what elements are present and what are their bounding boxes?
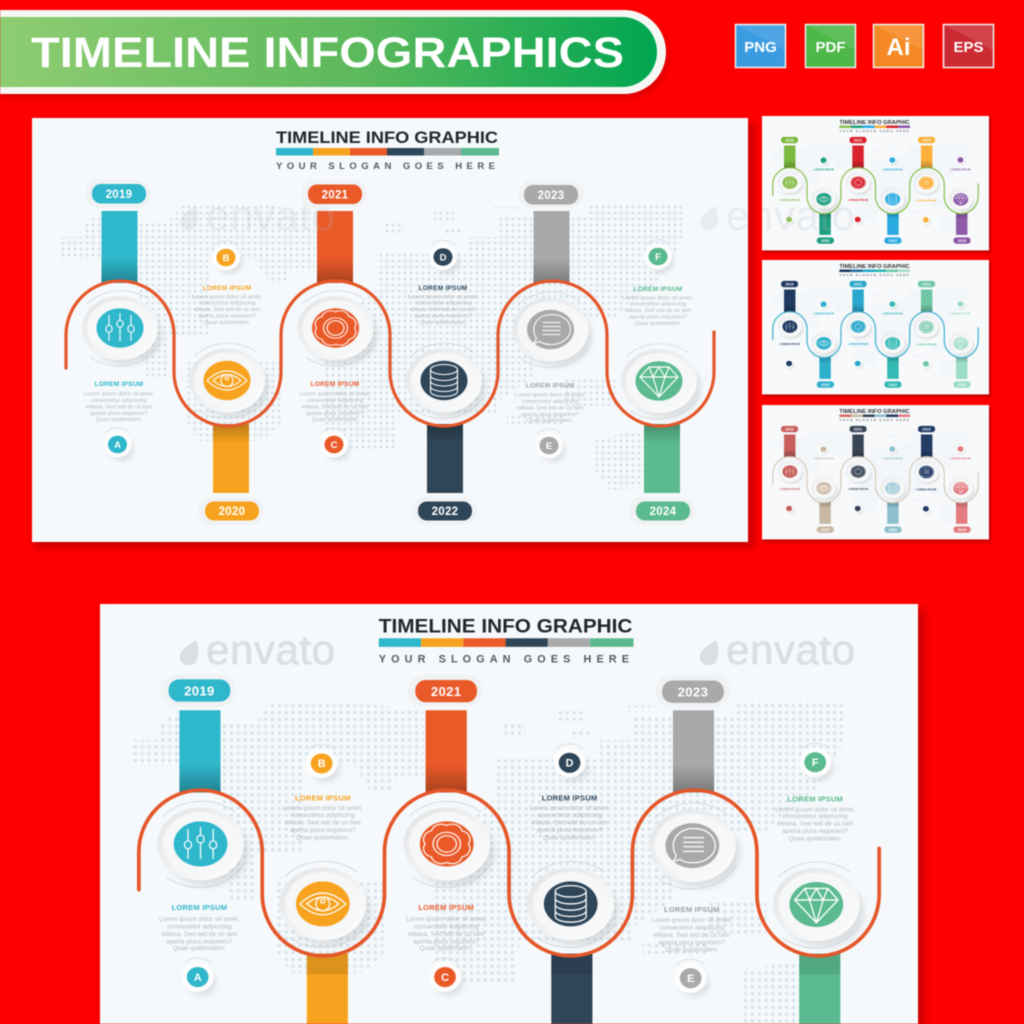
thumbnail: blue variant xyxy=(762,260,992,398)
text block B xyxy=(283,794,363,841)
thumbnail year pills: 2024 xyxy=(958,528,966,532)
letter badge C xyxy=(320,428,350,460)
pill 2019 xyxy=(161,675,236,707)
letter badge C: C xyxy=(441,972,449,984)
badge: PNG: PNG xyxy=(744,39,777,56)
pill 2022: 2022 xyxy=(432,506,458,518)
thumbnail year pills xyxy=(781,137,971,244)
thumbnail year pills: 2020 xyxy=(821,528,830,532)
heading: TIMELINE INFO GRAPHIC xyxy=(276,128,498,147)
text block D: LOREM IPSUM xyxy=(542,794,597,803)
world dot map xyxy=(132,700,843,1023)
text block A: elitasa. Sed wid de us tam xyxy=(86,404,152,410)
thumbnail letter badges xyxy=(785,444,966,514)
node: sliders icon xyxy=(82,291,162,366)
pill 2020: 2020 xyxy=(219,506,245,518)
heading colour bar xyxy=(379,638,634,647)
letter badge D xyxy=(554,744,588,781)
letter badge E xyxy=(535,429,565,462)
thumbnail year pills xyxy=(781,426,971,533)
text block B: elitasa. Sed wid de us tam xyxy=(194,307,260,313)
thumbnail nodes xyxy=(778,315,974,355)
letter badge B: B xyxy=(223,253,230,264)
letter badge B xyxy=(212,241,242,274)
thumbnail captions: LOREM IPSUM xyxy=(916,342,937,346)
text block F: elitasa. Sed wid de us tam xyxy=(625,308,691,314)
thumbnail year pills: 2021 xyxy=(854,282,862,286)
pill 2021 xyxy=(407,675,483,707)
text block A: aperta plura requirero? xyxy=(90,411,148,417)
thumbnail colour bar xyxy=(839,270,910,272)
text block D xyxy=(529,794,610,841)
thumbnail captions xyxy=(780,312,971,346)
watermark: upper row xyxy=(180,203,853,231)
text block D: LOREM IPSUM xyxy=(419,285,468,292)
letter badge B xyxy=(306,744,340,782)
letter badge A: A xyxy=(194,972,202,984)
node: chat icon xyxy=(512,292,592,368)
text block D: Quae quidematen. xyxy=(543,834,597,841)
text block C: Quae quidematen. xyxy=(312,417,359,423)
letter badge F: F xyxy=(655,252,661,263)
thumbnail heading: TIMELINE INFO GRAPHIC xyxy=(839,409,910,415)
letter badge E: E xyxy=(546,441,552,452)
thumbnail bars xyxy=(784,289,967,379)
pill 2024 xyxy=(629,497,695,525)
pill 2022 xyxy=(411,497,477,525)
thumbnail captions: LOREM IPSUM xyxy=(780,198,800,202)
thumbnail slogan: YOUR SLOGAN GOES HERE xyxy=(839,418,909,422)
thumbnail year pills: 2024 xyxy=(958,239,966,243)
thumbnail captions: LOREM IPSUM xyxy=(950,457,971,461)
thumbnail year pills: 2019 xyxy=(785,138,794,142)
thumbnail year pills: 2019 xyxy=(785,427,794,431)
text block F xyxy=(775,795,855,842)
text block E: elitasa. Sed wid de us tam xyxy=(654,932,730,939)
letter badge E xyxy=(675,959,709,996)
letter badge F: F xyxy=(812,757,819,769)
thumbnail year pills: 2021 xyxy=(854,427,862,431)
world dot map xyxy=(60,202,682,490)
text block A: Quae quidematen. xyxy=(96,417,143,423)
text block F: Lorem ipsum dolor sit amet, xyxy=(775,806,855,813)
text block D: aperta plura requirero? xyxy=(414,314,472,320)
letter badge B: B xyxy=(318,758,326,770)
text block C: elitasa. Sed wid de us tam xyxy=(408,931,484,938)
letter badge F xyxy=(799,743,833,781)
thumbnail captions: LOREM IPSUM xyxy=(916,198,937,202)
text block E: Lorem ipsum dolor sit amet, xyxy=(515,392,586,398)
thumbnail captions: LOREM IPSUM xyxy=(882,168,903,172)
thumbnail captions: LOREM IPSUM xyxy=(882,312,903,316)
thumbnail year pills: 2019 xyxy=(785,282,794,286)
node: database icon xyxy=(406,343,486,419)
text block E: consectetur adipiscing xyxy=(522,399,578,405)
panel: lower enlarged timeline xyxy=(100,604,925,1024)
thumbnail heading: TIMELINE INFO GRAPHIC xyxy=(839,264,910,270)
thumbnail bars xyxy=(784,434,967,524)
text block C: consectetur adipiscing xyxy=(307,398,363,404)
text block E: LOREM IPSUM xyxy=(664,905,720,914)
slogan: YOUR SLOGAN GOES HERE xyxy=(379,653,629,665)
year bars xyxy=(102,211,680,493)
text block F: consectetur adipiscing xyxy=(630,302,686,308)
text block E: aperta plura requirero? xyxy=(659,939,725,946)
letter badge A xyxy=(104,428,134,460)
text block B: consectetur adipiscing xyxy=(199,300,255,306)
letter badge D xyxy=(429,240,459,273)
node: database icon xyxy=(527,861,619,947)
text block F xyxy=(623,286,694,327)
letter badge C: C xyxy=(331,440,338,451)
thumbnail slogan: YOUR SLOGAN GOES HERE xyxy=(839,129,909,133)
text block D: Lorem ipsum dolor sit amet, xyxy=(408,294,479,300)
text block B xyxy=(192,285,263,326)
letter badge E: E xyxy=(687,973,694,985)
text block C: consectetur adipiscing xyxy=(414,923,479,930)
text block D: aperta plura requirero? xyxy=(537,827,603,834)
node: gear icon xyxy=(298,291,378,366)
pill 2021: 2021 xyxy=(431,684,461,699)
text block D: Quae quidematen. xyxy=(420,320,467,326)
banner heading: TIMELINE INFOGRAPHICS xyxy=(31,29,624,77)
text block F: Lorem ipsum dolor sit amet, xyxy=(623,296,694,302)
badge: Ai xyxy=(874,24,924,68)
letter badge C xyxy=(429,958,463,995)
thumbnail wave connector xyxy=(773,168,978,214)
text block B: Lorem ipsum dolor sit amet, xyxy=(283,805,363,812)
node: chat icon xyxy=(649,803,740,889)
thumbnail captions: LOREM IPSUM xyxy=(814,312,834,316)
badge: Ai: Ai xyxy=(886,34,910,61)
node: eye icon xyxy=(189,343,269,419)
thumbnail year pills: 2022 xyxy=(889,239,897,243)
text block A: Quae quidematen. xyxy=(173,945,226,952)
text block B: Quae quidematen. xyxy=(204,320,251,326)
thumbnail year pills: 2023 xyxy=(922,427,931,431)
text block C: aperta plura requirero? xyxy=(306,411,364,417)
watermark: lower row: envato xyxy=(726,626,855,673)
text block F: LOREM IPSUM xyxy=(634,286,683,293)
text block E: LOREM IPSUM xyxy=(526,382,575,390)
thumbnail: green variant xyxy=(762,116,992,254)
thumbnail captions: LOREM IPSUM xyxy=(950,312,971,316)
pill 2019: 2019 xyxy=(184,683,215,698)
badge: PNG xyxy=(736,24,786,68)
thumbnail letter badges xyxy=(785,155,966,225)
text block A: consectetur adipiscing xyxy=(167,923,232,930)
thumbnail captions: LOREM IPSUM xyxy=(814,168,834,172)
text block A xyxy=(159,903,240,952)
pill 2021 xyxy=(301,180,367,208)
text block E: aperta plura requirero? xyxy=(521,412,579,418)
thumbnail captions: LOREM IPSUM xyxy=(848,487,869,491)
thumbnail year pills xyxy=(781,281,971,388)
thumbnail captions: LOREM IPSUM xyxy=(780,342,800,346)
text block B: Quae quidematen. xyxy=(296,834,350,841)
text block D: consectetur adipiscing xyxy=(537,812,602,819)
text block C: aperta plura requirero? xyxy=(413,938,480,945)
text block C: Lorem ipsum dolor sit amet, xyxy=(406,916,486,923)
thumbnail captions: LOREM IPSUM xyxy=(916,487,937,491)
text block E xyxy=(652,905,732,953)
letter badge D: D xyxy=(566,758,574,770)
text block E: elitasa. Sed wid de us tam xyxy=(517,406,583,412)
badge: EPS: EPS xyxy=(953,39,984,56)
thumbnail year pills: 2020 xyxy=(821,239,830,243)
wave connector xyxy=(66,281,714,426)
text block C: elitasa. Sed wid de us tam xyxy=(302,404,368,410)
text block F: aperta plura requirero? xyxy=(629,314,687,320)
thumbnail year pills: 2023 xyxy=(922,138,931,142)
text block C: LOREM IPSUM xyxy=(311,381,360,388)
thumbnail heading: TIMELINE INFO GRAPHIC xyxy=(839,120,910,126)
thumbnail: muted variant xyxy=(762,405,992,543)
text block B: elitasa. Sed wid de us tam xyxy=(285,820,361,827)
pill 2024: 2024 xyxy=(650,506,677,518)
text block A: LOREM IPSUM xyxy=(172,903,227,912)
text block D xyxy=(408,285,479,326)
thumbnail captions: LOREM IPSUM xyxy=(848,198,869,202)
watermark: upper row: envato xyxy=(206,192,335,239)
format badges xyxy=(736,24,994,68)
text block A: consectetur adipiscing xyxy=(91,398,147,404)
thumbnail year pills: 2023 xyxy=(922,282,931,286)
text block F: consectetur adipiscing xyxy=(783,813,848,820)
year pills xyxy=(161,675,731,707)
thumbnail captions: LOREM IPSUM xyxy=(882,457,903,461)
pill 2023 xyxy=(655,675,731,707)
heading: TIMELINE INFO GRAPHIC xyxy=(379,616,632,638)
pill 2019: 2019 xyxy=(106,189,132,201)
thumbnail captions: LOREM IPSUM xyxy=(780,487,800,491)
heading colour bar xyxy=(276,148,499,156)
text block D: elitasa. Sed wid de us tam xyxy=(532,820,608,827)
thumbnail colour bar xyxy=(839,126,910,128)
badge: PDF: PDF xyxy=(816,39,846,56)
node: gear icon xyxy=(403,801,495,887)
text block B: LOREM IPSUM xyxy=(295,794,351,803)
text block F: elitasa. Sed wid de us tam xyxy=(777,821,853,828)
node: diamond icon xyxy=(621,344,701,419)
text block F: Quae quidematen. xyxy=(788,835,842,842)
pill 2023: 2023 xyxy=(538,190,564,202)
wave connector xyxy=(139,790,879,956)
year pills xyxy=(85,180,695,525)
text block F: Quae quidematen. xyxy=(635,321,682,327)
text block E: Quae quidematen. xyxy=(665,946,719,953)
thumbnail colour bar xyxy=(839,415,910,417)
thumbnail nodes xyxy=(778,460,974,500)
text block A: Lorem ipsum dolor sit amet, xyxy=(159,916,240,923)
badge: PDF xyxy=(806,24,856,68)
watermark: upper row: envato xyxy=(726,192,855,239)
text block F: LOREM IPSUM xyxy=(787,795,843,804)
text block E: Quae quidematen. xyxy=(527,418,574,424)
letter badge D: D xyxy=(440,252,447,263)
text block C: LOREM IPSUM xyxy=(418,903,474,912)
node: diamond icon xyxy=(773,862,864,948)
text block F: aperta plura requirero? xyxy=(782,828,849,835)
panel: main timeline (upper) xyxy=(32,118,754,548)
slogan: YOUR SLOGAN GOES HERE xyxy=(276,161,495,172)
text block E: Lorem ipsum dolor sit amet, xyxy=(652,917,732,924)
thumbnail captions: LOREM IPSUM xyxy=(848,342,869,346)
pill 2023 xyxy=(518,180,584,208)
thumbnail year pills: 2024 xyxy=(958,383,966,387)
text block D: consectetur adipiscing xyxy=(415,300,471,306)
text block C: Quae quidematen. xyxy=(419,945,473,952)
thumbnail wave connector xyxy=(773,312,978,358)
text block B: aperta plura requirero? xyxy=(198,314,256,320)
text block A: aperta plura requirero? xyxy=(166,938,233,945)
thumbnail captions: LOREM IPSUM xyxy=(814,457,834,461)
banner: title pill xyxy=(0,10,668,98)
text block B: Lorem ipsum dolor sit amet, xyxy=(192,294,263,300)
text block A: LOREM IPSUM xyxy=(95,381,144,388)
thumbnail year pills: 2021 xyxy=(854,138,862,142)
letter badge F xyxy=(644,240,674,272)
thumbnail year pills: 2022 xyxy=(889,528,897,532)
thumbnail slogan: YOUR SLOGAN GOES HERE xyxy=(839,273,909,277)
text block A: Lorem ipsum dolor sit amet, xyxy=(84,392,155,398)
pill 2020 xyxy=(198,497,264,525)
pill 2023: 2023 xyxy=(678,685,708,700)
letter badge A xyxy=(182,958,216,995)
year bars xyxy=(179,710,840,1024)
node: sliders icon xyxy=(157,801,249,887)
thumbnail letter badges xyxy=(785,299,966,369)
text block A: elitasa. Sed wid de us tam xyxy=(161,931,237,938)
text block C xyxy=(406,903,486,952)
pill 2021: 2021 xyxy=(322,190,349,202)
badge: EPS xyxy=(944,24,994,68)
text block A xyxy=(84,381,155,423)
text block D: elitasa. Sed wid de us tam xyxy=(410,307,476,313)
thumbnail captions xyxy=(780,168,971,202)
text block B: aperta plura requirero? xyxy=(290,827,356,834)
text block B: consectetur adipiscing xyxy=(291,812,355,819)
thumbnail captions: LOREM IPSUM xyxy=(950,168,971,172)
thumbnail year pills: 2020 xyxy=(821,383,830,387)
thumbnail captions xyxy=(780,457,971,491)
watermark: lower row xyxy=(180,636,854,666)
text block C xyxy=(300,381,371,423)
watermark: lower row: envato xyxy=(206,626,335,673)
text block C: Lorem ipsum dolor sit amet, xyxy=(300,392,371,398)
thumbnail wave connector xyxy=(773,457,978,503)
text block B: LOREM IPSUM xyxy=(203,285,252,292)
thumbnail bars xyxy=(784,145,967,235)
text block E xyxy=(515,382,586,424)
text block D: Lorem ipsum dolor sit amet, xyxy=(529,805,610,812)
thumbnail nodes xyxy=(778,171,974,211)
pill 2019 xyxy=(85,180,151,208)
letter badge A: A xyxy=(114,440,121,451)
text block E: consectetur adipiscing xyxy=(660,925,724,932)
thumbnail year pills: 2022 xyxy=(889,383,897,387)
node: eye icon xyxy=(279,861,371,947)
